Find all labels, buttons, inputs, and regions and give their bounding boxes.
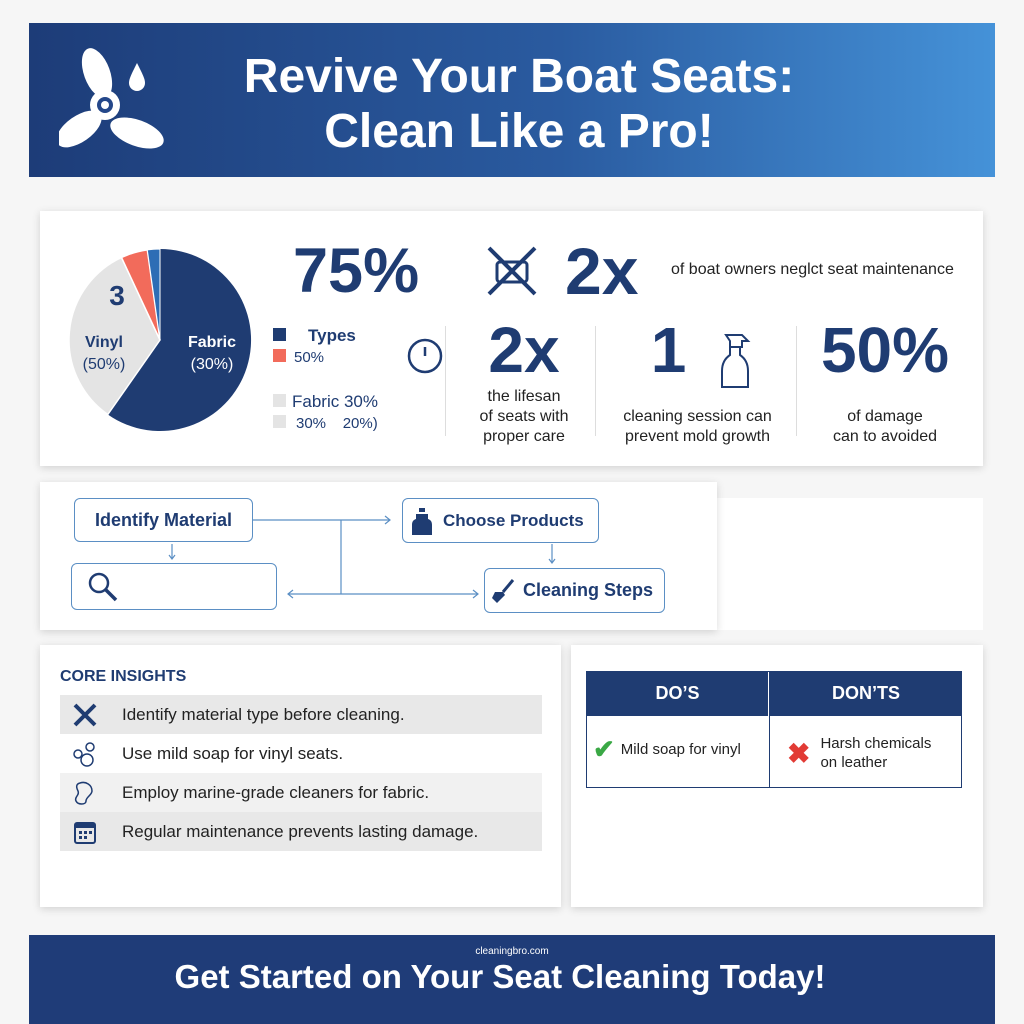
- box: cleaning steps: Cleaning Steps: [523, 580, 653, 600]
- stat: 2x lifespan: proper care: [483, 428, 565, 445]
- call to action: Get Started on Your Seat Cleaning Today!: [175, 958, 825, 995]
- legend: Types: [308, 326, 356, 345]
- pie chart: 3: [109, 280, 125, 311]
- box: identify material: [74, 498, 253, 542]
- table: DO’S: [655, 683, 700, 703]
- box: cleaning steps: [484, 568, 665, 613]
- insight 1: Identify material type before cleaning.: [122, 704, 405, 724]
- icon: clock: [408, 338, 442, 374]
- pie chart: (30%): [191, 356, 233, 373]
- insight 2: [73, 742, 343, 767]
- panel: right blank: [717, 498, 983, 630]
- stat: 2x lifespan: 2x: [488, 314, 560, 386]
- title: [244, 50, 794, 158]
- do item: ✔: [593, 734, 615, 764]
- dont item: [787, 735, 931, 771]
- panel: process flow: [40, 482, 717, 630]
- title: Clean Like a Pro!: [324, 105, 714, 158]
- title: Revive Your Boat Seats:: [244, 50, 794, 103]
- dont item: ✖: [787, 738, 810, 768]
- stat: 1 session: prevent mold growth: [625, 428, 770, 445]
- stat: 50%: [821, 314, 949, 445]
- stat: 2x lifespan: [480, 314, 568, 445]
- stat: 50%: of damage: [847, 408, 923, 425]
- pie chart: Vinyl: [85, 334, 123, 351]
- stat: 2x neglect: 2x: [565, 234, 638, 308]
- dont item: on leather: [820, 754, 887, 771]
- panel: dos and donts: [571, 645, 983, 907]
- stat: 75%: 75%: [293, 236, 419, 306]
- icon: propeller with drop: [59, 48, 164, 148]
- box: identify material: Identify Material: [95, 510, 232, 530]
- header banner: [29, 23, 995, 177]
- footer banner: [29, 935, 995, 1024]
- pie chart: (50%): [83, 356, 125, 373]
- panel: statistics: of boat owners neglct seat maintenance: [671, 261, 954, 278]
- do item: [593, 734, 741, 764]
- stat: 50%: can to avoided: [833, 428, 937, 445]
- panel: core insights: [40, 645, 561, 907]
- table: DON’TS: [832, 683, 900, 703]
- dont item: Harsh chemicals: [820, 735, 931, 752]
- legend: 50%: [294, 349, 324, 366]
- box: search: [71, 563, 277, 610]
- insight 3: [60, 773, 542, 812]
- pie chart: Fabric: [188, 334, 236, 351]
- box: choose products: [402, 498, 599, 543]
- insight 3: Employ marine-grade cleaners for fabric.: [122, 782, 429, 802]
- icon: spray bottle: [721, 334, 750, 388]
- insight 4: [60, 812, 542, 851]
- stat: 2x lifespan: the lifesan: [488, 388, 560, 405]
- insight 4: Regular maintenance prevents lasting damage.: [122, 822, 478, 840]
- pie chart: [70, 249, 252, 431]
- stat: 2x lifespan: of seats with: [480, 408, 568, 425]
- panel: statistics: [40, 211, 983, 466]
- insight 2: Use mild soap for vinyl seats.: [122, 744, 343, 762]
- heading: CORE INSIGHTS: [60, 668, 186, 685]
- stat: 1 session: cleaning session can: [623, 408, 772, 425]
- box: choose products: Choose Products: [443, 510, 584, 530]
- icon: crossed seat: [488, 246, 536, 296]
- stat: 1 session: [623, 314, 772, 445]
- table: [586, 671, 962, 788]
- stat: 1 session: 1: [651, 314, 686, 386]
- website: cleaningbro.com: [475, 946, 549, 957]
- legend: [273, 326, 378, 432]
- legend: 30% 20%): [296, 415, 378, 432]
- do item: Mild soap for vinyl: [621, 741, 741, 758]
- stat: 50%: 50%: [821, 314, 949, 386]
- insight 1: [60, 695, 542, 734]
- legend: Fabric 30%: [292, 392, 378, 411]
